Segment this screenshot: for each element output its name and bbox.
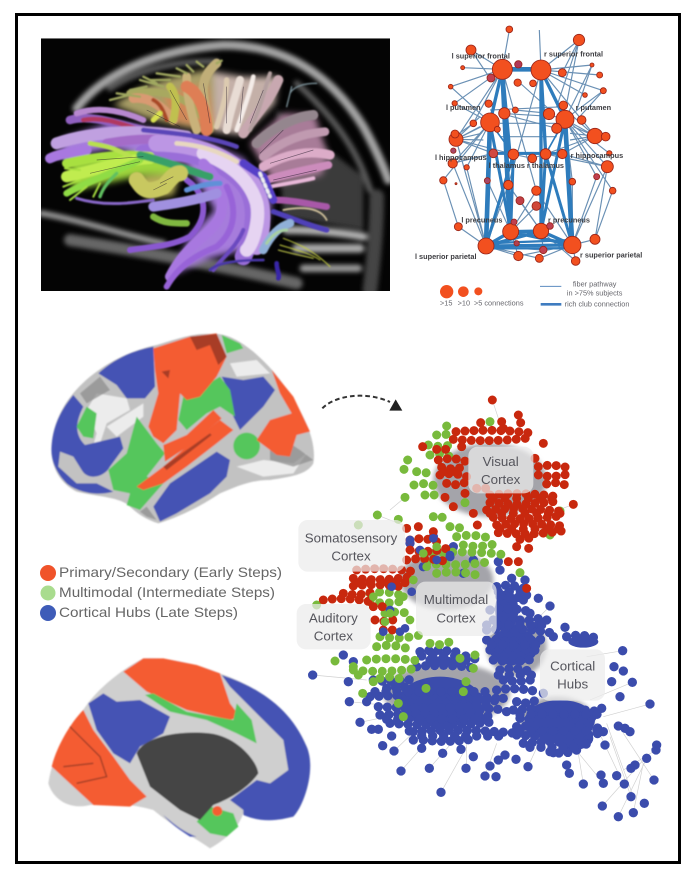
fibres: lavender arching bundle <box>77 143 330 287</box>
network region labels: l putamen <box>446 103 481 112</box>
label: Somatosensory Cortex: Somatosensory <box>305 530 398 545</box>
fibres: pale pink upper right fan <box>217 73 330 230</box>
green nodes <box>317 422 560 717</box>
medial red regions <box>52 658 240 807</box>
blue regions <box>51 347 275 522</box>
mixed foreground nodes <box>373 538 450 632</box>
label: Multimodal Cortex: Cortex <box>436 610 476 625</box>
legend: brain map colour key: Primary/Secondary (Early Steps) <box>59 564 282 580</box>
fibres: tan and orange upper fan <box>110 61 222 130</box>
network legend: in >75% subjects <box>567 289 623 298</box>
network region labels <box>415 49 642 261</box>
network legend: fiber pathway <box>573 280 617 289</box>
legend: brain map colour key: Multimodal (Intermediate Steps) <box>59 584 275 600</box>
red regions <box>137 333 310 490</box>
network thin fiber pathways <box>443 30 613 261</box>
network region labels: r superior frontal <box>544 49 603 58</box>
brain: lateral surface map <box>51 333 314 523</box>
chart: cortical network graph <box>297 400 657 817</box>
network rich club connections <box>486 69 572 248</box>
legend: brain map colour key <box>40 564 282 621</box>
label: Somatosensory Cortex: Cortex <box>331 549 371 564</box>
green regions <box>77 335 260 510</box>
network region labels: l thalamus r thalamus <box>489 161 564 170</box>
network region labels: l superior parietal <box>415 252 476 261</box>
medial green regions <box>145 693 257 837</box>
legend: brain map colour key: Cortical Hubs (Late Steps) <box>59 604 238 620</box>
blue dense rows <box>370 585 600 753</box>
network legend: >15 <box>440 298 452 307</box>
label: Visual Cortex <box>468 447 533 493</box>
label: Auditory Cortex: Cortex <box>314 629 353 644</box>
chart: rich club network diagram <box>415 26 642 308</box>
label: Cortical Hubs <box>540 649 605 701</box>
network legend: >10 <box>458 298 470 307</box>
brain: medial surface map <box>48 658 310 848</box>
medial wall <box>137 732 258 820</box>
label: Cortical Hubs: Cortical <box>550 659 595 674</box>
fibre colour masses <box>58 68 328 275</box>
label: Visual Cortex: Cortex <box>481 472 521 487</box>
label: Auditory Cortex <box>297 604 371 649</box>
network region labels: r superior parietal <box>580 251 642 260</box>
label: Cortical Hubs: Hubs <box>557 677 589 692</box>
label: Visual Cortex: Visual <box>483 454 519 469</box>
network region labels: r precuneus <box>548 215 590 224</box>
network region labels: l precuneus <box>461 215 502 224</box>
fibres: green frontal fan <box>63 143 210 223</box>
blue nodes <box>313 537 657 817</box>
label: Somatosensory Cortex <box>298 520 405 572</box>
panel: tractography brain image <box>41 38 390 291</box>
medial blue regions <box>88 675 310 820</box>
network region labels: r hippocampus <box>571 151 623 160</box>
network legend: >5 connections <box>474 298 524 307</box>
network region labels: l hippocampus <box>435 153 487 162</box>
network region labels: r putamen <box>576 103 612 112</box>
label: Auditory Cortex: Auditory <box>309 610 358 625</box>
network legend: rich club connection <box>565 299 629 308</box>
network region labels: l superior frontal <box>452 52 510 61</box>
graph edges <box>313 400 656 817</box>
arrow: dashed curve to network <box>322 396 402 411</box>
label: Multimodal Cortex: Multimodal <box>424 592 488 607</box>
fibres: dark strand texture <box>90 83 317 190</box>
network hub nodes <box>440 26 616 265</box>
fibres: magenta and violet frontal band <box>50 110 237 158</box>
red nodes <box>323 400 573 630</box>
network legend <box>440 280 629 308</box>
label: Multimodal Cortex <box>416 582 497 636</box>
